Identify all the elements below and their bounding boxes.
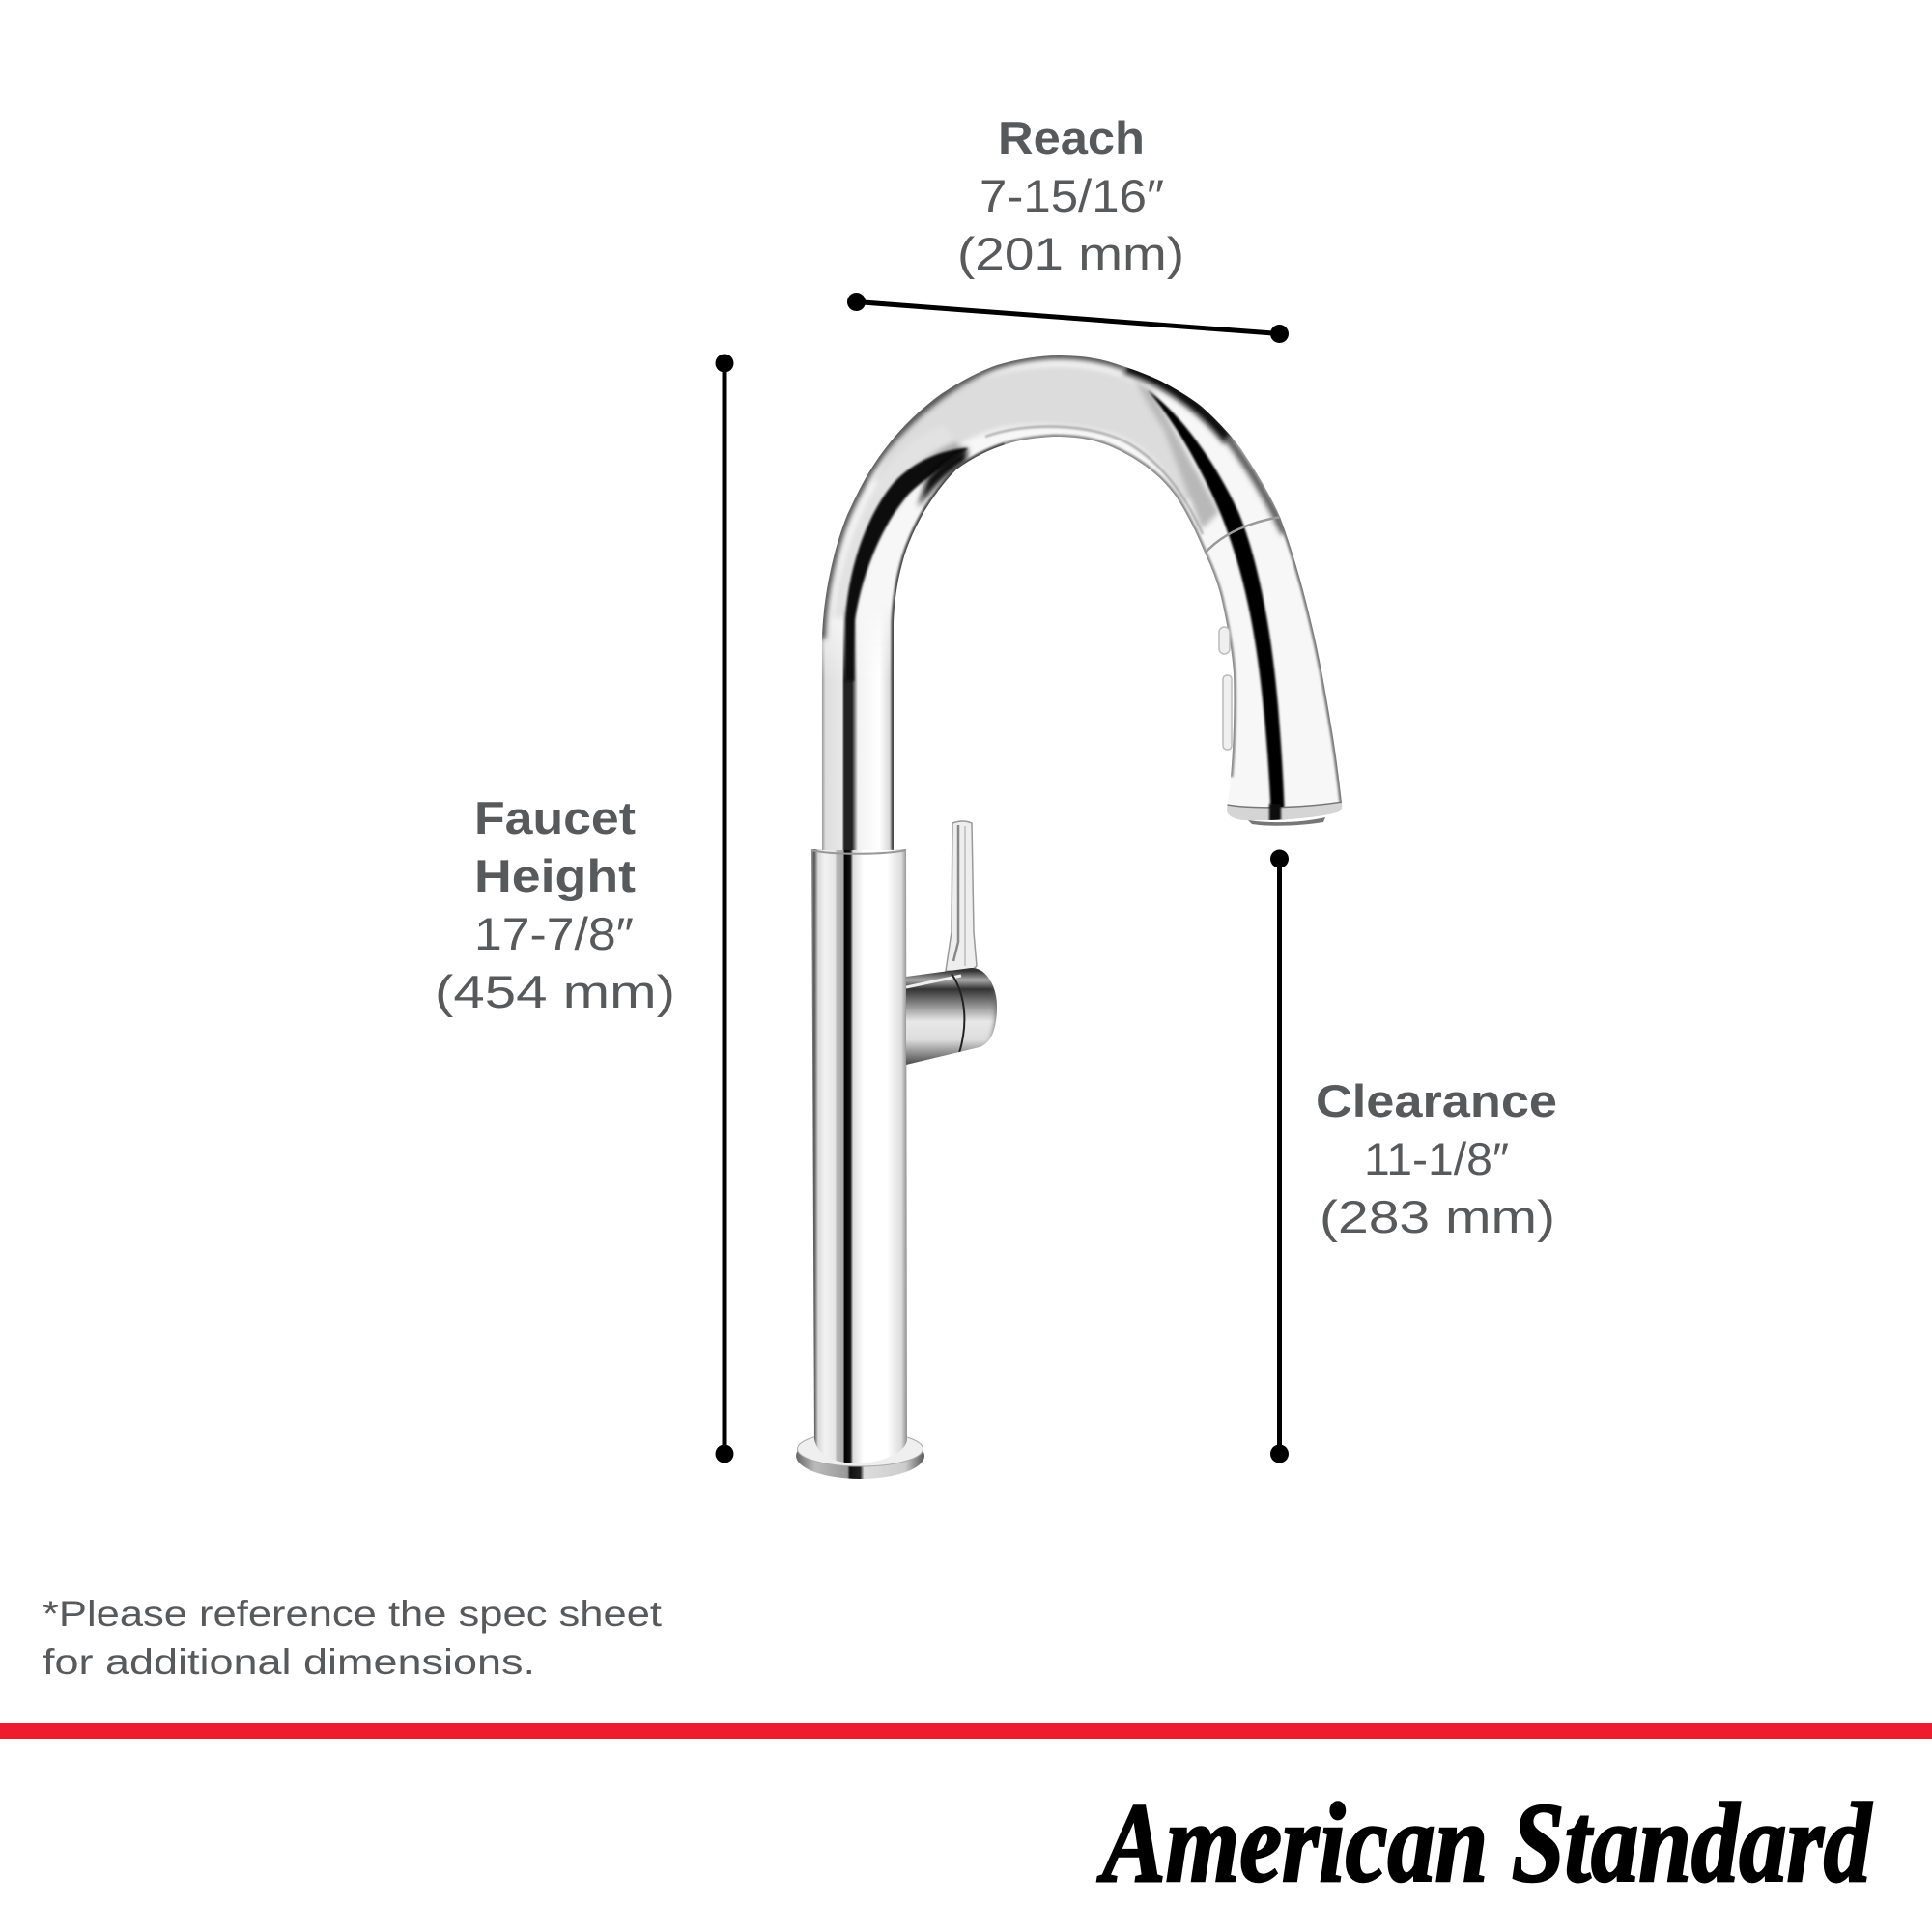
spray head rim (1227, 803, 1343, 821)
gray band above left stripe (894, 442, 964, 512)
red divider band (0, 1723, 1932, 1739)
reach label: Reach (998, 112, 1145, 163)
seam (1204, 517, 1281, 554)
inner edge (894, 444, 1006, 850)
dark left stripe (845, 448, 968, 681)
clearance label: 11-1/8″ (1364, 1133, 1509, 1184)
handle body (906, 966, 1005, 1065)
reach label: 7-15/16″ (980, 170, 1164, 221)
footnote: *Please reference the spec sheet (43, 1594, 663, 1634)
gray band beside right stripe (1132, 379, 1219, 529)
faucet height label: (454 mm) (435, 966, 675, 1017)
base plate (796, 1432, 924, 1479)
clearance label: Clearance (1316, 1075, 1557, 1126)
faucet illustration (796, 355, 1343, 1479)
gray top of the arc (874, 366, 1201, 502)
faucet height label: 17-7/8″ (474, 908, 634, 959)
footnote: for additional dimensions. (43, 1642, 535, 1682)
faucet height label: Faucet (474, 792, 636, 843)
spray head buttons (1219, 627, 1232, 750)
curved spout (821, 355, 1343, 852)
spray head nozzles (1248, 817, 1325, 826)
clearance label: (283 mm) (1320, 1191, 1555, 1242)
column body (811, 849, 907, 1463)
dark top-right band (1125, 367, 1229, 440)
gray left shoulder (833, 479, 896, 618)
dark right stripe (1148, 390, 1285, 821)
reach label (957, 112, 1184, 279)
reach dimension line (847, 293, 1289, 343)
tube lower section (822, 604, 894, 852)
faucet height dimension line (715, 354, 734, 1463)
faucet height label: Height (474, 850, 636, 901)
reach label: (201 mm) (957, 228, 1184, 279)
dark outer edge (822, 355, 1125, 639)
footnote (43, 1594, 663, 1682)
clearance dimension line (1270, 850, 1289, 1463)
clearance label (1316, 1075, 1557, 1242)
faucet height label (435, 792, 675, 1017)
handle lever (946, 821, 977, 972)
